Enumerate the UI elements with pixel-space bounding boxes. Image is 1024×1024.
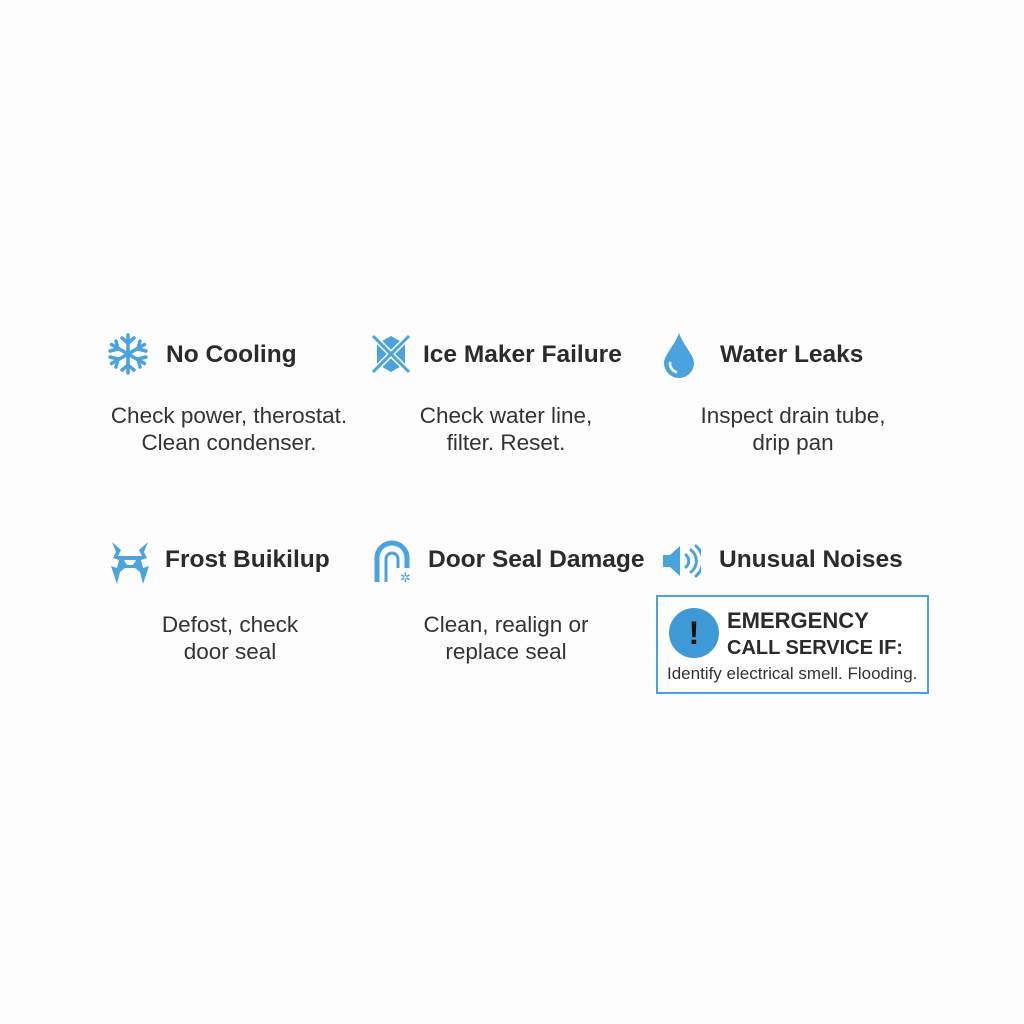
icon: ice maker	[372, 335, 410, 373]
text: door seal: replace seal	[445, 639, 567, 664]
text: ice maker: Check water line,	[420, 403, 592, 428]
heading: Water Leaks: Water Leaks	[720, 341, 863, 368]
heading: emergency: EMERGENCY	[727, 608, 869, 633]
text: ice maker: filter. Reset.	[447, 430, 565, 455]
text: frost: door seal	[184, 639, 276, 664]
text: frost	[162, 612, 298, 664]
icon: frost	[111, 542, 149, 584]
heading: Ice Maker Failure: Ice Maker Failure	[423, 341, 622, 368]
icon: door seal	[374, 540, 411, 584]
icon: water drop	[664, 333, 694, 378]
text: door seal	[423, 612, 589, 664]
text: water leaks	[700, 403, 886, 455]
text: no cooling	[111, 403, 347, 455]
text: emergency details: Identify electrical smell. Flooding.	[667, 664, 917, 683]
heading: emergency	[727, 608, 903, 659]
heading: Door Seal Damage: Door Seal Damage	[428, 546, 644, 573]
text: door seal: Clean, realign or	[423, 612, 589, 637]
icon: exclamation: !	[689, 615, 699, 651]
text: water leaks: Inspect drain tube,	[700, 403, 886, 428]
heading: Unusual Noises: Unusual Noises	[719, 546, 903, 573]
text: frost: Defost, check	[162, 612, 298, 637]
text: no cooling: Clean condenser.	[141, 430, 317, 455]
icon: exclamation	[669, 608, 719, 658]
heading: Frost Buikilup: Frost Buikilup	[165, 546, 330, 573]
heading: emergency: CALL SERVICE IF:	[727, 637, 903, 659]
icon: speaker	[663, 544, 701, 578]
callout: emergency box	[656, 595, 929, 694]
icon: snowflake	[108, 333, 148, 375]
text: ice maker	[420, 403, 592, 455]
heading: No Cooling: No Cooling	[166, 341, 297, 368]
text: water leaks: drip pan	[752, 430, 834, 455]
text: no cooling: Check power, therostat.	[111, 403, 347, 428]
